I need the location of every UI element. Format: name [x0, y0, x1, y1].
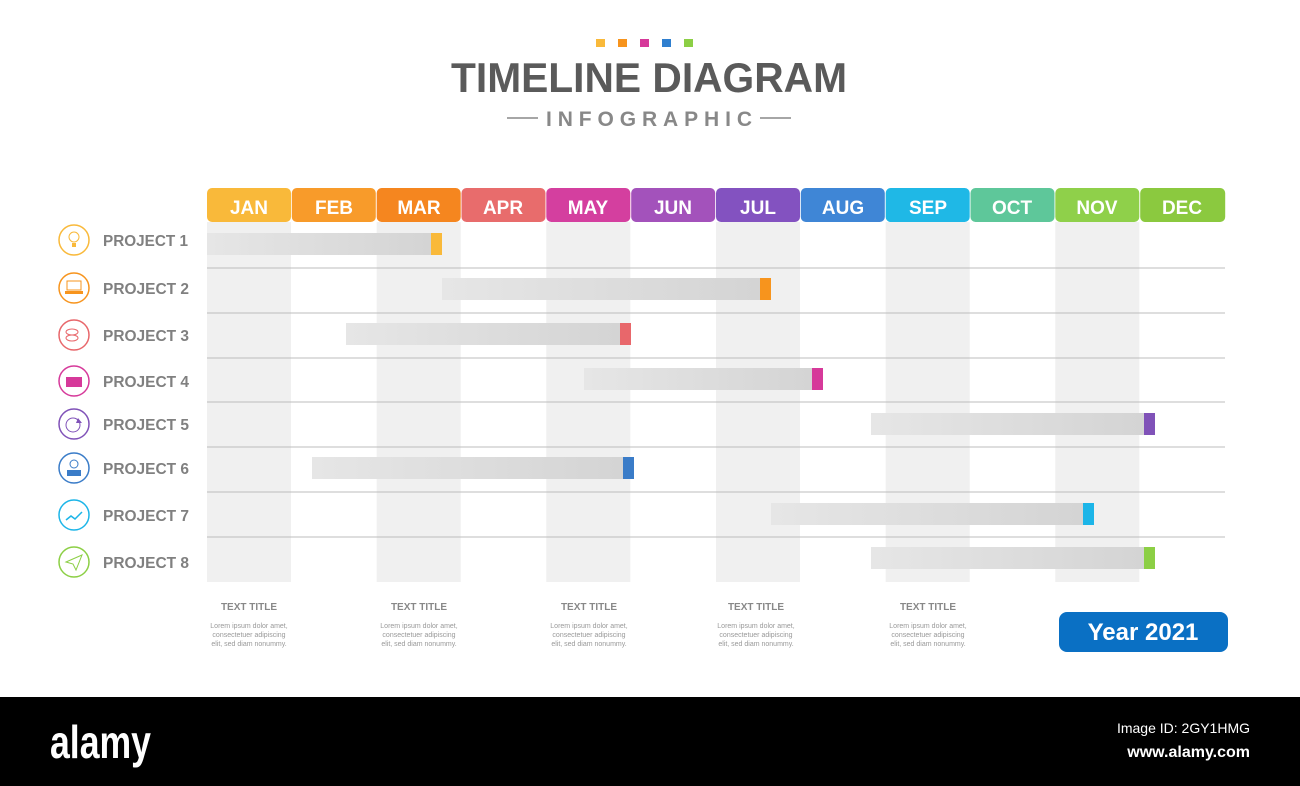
- shaded month columns: [207, 222, 1139, 582]
- text blocks: TEXT TITLE: [561, 602, 617, 613]
- project labels with icons: PROJECT 4: [103, 374, 189, 391]
- month header: NOV: [1076, 198, 1118, 219]
- project labels with icons: PROJECT 6: [103, 461, 189, 478]
- text blocks: Lorem ipsum dolor amet,: [889, 623, 967, 630]
- text blocks: consectetuer adipiscing: [891, 632, 965, 639]
- text blocks: TEXT TITLE: [728, 602, 784, 613]
- project labels with icons: PROJECT 7: [103, 508, 189, 525]
- text blocks: consectetuer adipiscing: [212, 632, 286, 639]
- project labels with icons: PROJECT 1: [103, 233, 188, 250]
- text blocks: consectetuer adipiscing: [719, 632, 793, 639]
- text blocks: elit, sed diam nonummy.: [551, 641, 627, 648]
- text blocks: Lorem ipsum dolor amet,: [380, 623, 458, 630]
- month header: AUG: [822, 198, 864, 219]
- text blocks: elit, sed diam nonummy.: [381, 641, 457, 648]
- project labels with icons: PROJECT 5: [103, 417, 189, 434]
- month header: JUN: [654, 198, 692, 219]
- text blocks: TEXT TITLE: [900, 602, 956, 613]
- text blocks: elit, sed diam nonummy.: [718, 641, 794, 648]
- project labels with icons: PROJECT 8: [103, 555, 189, 572]
- month header: JAN: [230, 198, 268, 219]
- text blocks: TEXT TITLE: [221, 602, 277, 613]
- text blocks: consectetuer adipiscing: [552, 632, 626, 639]
- text blocks: [210, 602, 967, 648]
- text blocks: Lorem ipsum dolor amet,: [550, 623, 628, 630]
- month header: [207, 188, 1225, 222]
- gantt bars: [207, 233, 1155, 569]
- month header: MAY: [568, 198, 609, 219]
- month header: SEP: [909, 198, 947, 219]
- month header: JUL: [740, 198, 776, 219]
- footer bar: Image ID: 2GY1HMG: [1117, 720, 1250, 736]
- text blocks: Lorem ipsum dolor amet,: [717, 623, 795, 630]
- text blocks: Lorem ipsum dolor amet,: [210, 623, 288, 630]
- footer bar: alamy: [50, 716, 151, 768]
- project labels with icons: PROJECT 2: [103, 281, 189, 298]
- footer bar: [0, 697, 1300, 786]
- text blocks: consectetuer adipiscing: [382, 632, 456, 639]
- subtitle: INFOGRAPHIC: [546, 108, 752, 131]
- month header: OCT: [992, 198, 1032, 219]
- text blocks: TEXT TITLE: [391, 602, 447, 613]
- project labels with icons: PROJECT 3: [103, 328, 189, 345]
- month header: DEC: [1162, 198, 1202, 219]
- footer bar: www.alamy.com: [1126, 744, 1250, 761]
- project labels with icons: [59, 225, 189, 577]
- year badge: [1059, 612, 1228, 652]
- title: TIMELINE DIAGRAM: [451, 54, 847, 101]
- title dots: [596, 39, 693, 47]
- month header: APR: [483, 198, 523, 219]
- text blocks: elit, sed diam nonummy.: [211, 641, 287, 648]
- month header: MAR: [397, 198, 441, 219]
- month header: FEB: [315, 198, 353, 219]
- text blocks: elit, sed diam nonummy.: [890, 641, 966, 648]
- year badge: Year 2021: [1088, 619, 1198, 646]
